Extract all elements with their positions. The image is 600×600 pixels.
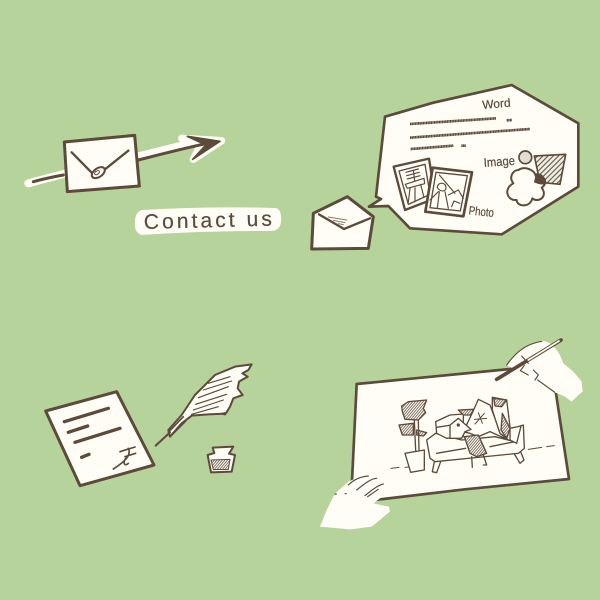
icon: left hand: [320, 475, 390, 529]
image icons: circle, square, cloud: [507, 151, 566, 205]
potted plant: [399, 400, 427, 472]
icon: open envelope: [312, 197, 373, 249]
label: photo: Photo: [468, 203, 495, 220]
icon: ink bottle: [208, 447, 235, 472]
person on sofa: [450, 397, 510, 467]
text lines: [410, 118, 530, 149]
photo 2: person: [425, 168, 472, 216]
mail icon group: envelope flying with arrow: [28, 135, 222, 192]
icon: closed envelope: [64, 135, 139, 192]
writing set group: [46, 364, 252, 486]
sofa: [427, 414, 524, 473]
floor line: [391, 446, 554, 468]
icon: hand with pen: [497, 340, 583, 402]
document: [46, 392, 154, 486]
photo 1: easel: [394, 159, 435, 210]
drawing scene group: [351, 365, 569, 502]
photos: [394, 159, 472, 216]
drawing on paper: [391, 397, 554, 473]
icon: quill: [156, 364, 252, 446]
label: image: Image: [483, 154, 515, 170]
label: contact us: Contact us: [144, 208, 272, 234]
panel: sketch paper: [351, 365, 569, 502]
panel: speech bubble: [369, 85, 578, 234]
arrow: [28, 136, 222, 183]
speech bubble group: [369, 85, 578, 234]
signature: [113, 447, 136, 469]
hands group: [320, 340, 583, 529]
label: word: Word: [482, 96, 511, 112]
